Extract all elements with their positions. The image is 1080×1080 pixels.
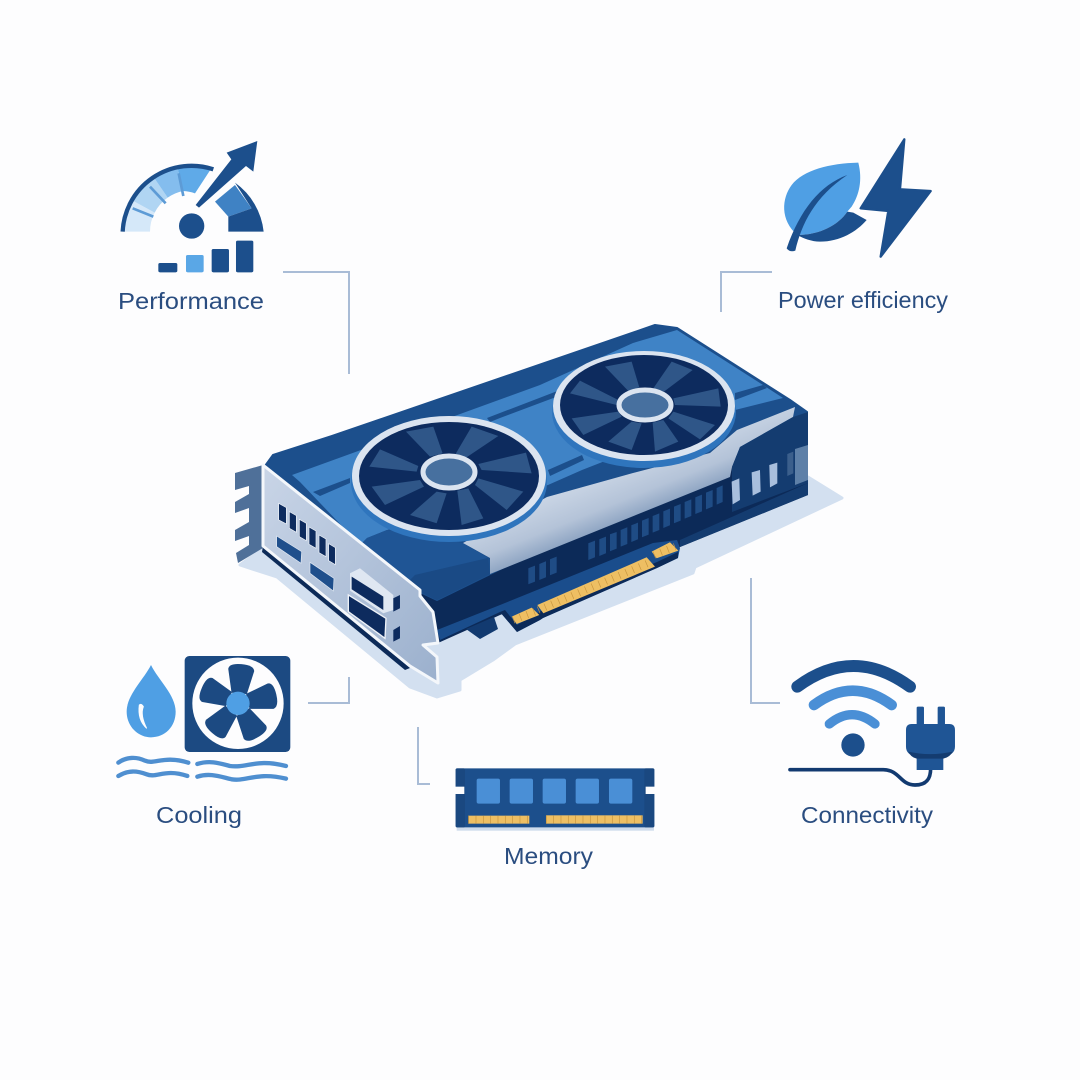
icon: water drop and fan: [118, 656, 290, 780]
lightning bolt: [861, 139, 931, 257]
label: performance: Performance: [118, 288, 264, 314]
gauge arrow: [196, 141, 257, 208]
card body: [273, 325, 808, 643]
connector line: memory: [418, 727, 430, 784]
connector line: cooling: [308, 677, 349, 703]
fan rim: [352, 416, 546, 536]
icon: performance gauge: [123, 141, 264, 272]
silver shroud band: [463, 407, 795, 574]
graphics card: [235, 325, 842, 697]
leaf: [784, 163, 860, 235]
bracket under line: [262, 546, 410, 670]
memory chips: [477, 779, 632, 804]
small connector tab: [466, 617, 498, 639]
fan shadow: [351, 422, 547, 542]
wifi dot: [841, 733, 865, 757]
fan disc: [560, 355, 728, 455]
pcb edge: [437, 540, 680, 640]
label: connectivity: Connectivity: [801, 802, 934, 828]
card drop shadow: [240, 477, 842, 697]
side vents: [732, 452, 793, 504]
leaf vein: [787, 175, 847, 251]
module shadow: [457, 827, 654, 831]
fan 2: [552, 351, 736, 468]
water drop: [127, 665, 176, 737]
board edges: [456, 768, 465, 827]
label: memory: Memory: [504, 843, 594, 869]
fan hub: [226, 692, 250, 715]
fan 1: [351, 416, 547, 542]
label: power efficiency: Power efficiency: [778, 287, 949, 313]
dark front chamfer: [408, 558, 490, 600]
bracket left tab: [235, 465, 263, 563]
gauge hub: [179, 213, 204, 239]
gold edge contacts: [512, 542, 678, 624]
port clips: [393, 595, 400, 612]
bracket plate: [263, 465, 438, 683]
fan shadow: [552, 356, 736, 468]
dark blue side panel: [732, 412, 808, 512]
wifi inner arc: [829, 715, 875, 724]
fan opening: [192, 658, 284, 749]
fan housing: [185, 656, 290, 752]
plug prongs: [917, 707, 924, 727]
gold contacts: [468, 816, 529, 824]
icon: wifi and plug: [790, 666, 955, 785]
gauge outer arc: [123, 166, 213, 232]
drop highlight: [139, 704, 147, 728]
hdmi port lower: [348, 595, 386, 638]
gauge segments: [125, 201, 155, 232]
fan blades: [570, 362, 721, 452]
wifi outer arc: [797, 666, 910, 687]
light blue shroud panel: [292, 330, 783, 545]
fan rim: [553, 351, 735, 461]
module board: [456, 768, 654, 827]
gauge bars: [158, 263, 177, 272]
lower side band: [680, 483, 808, 547]
top shroud: [265, 325, 807, 600]
plug collar: [908, 752, 953, 759]
wifi middle arc: [814, 691, 892, 705]
side panel end cap: [795, 445, 808, 485]
fan blades: [369, 427, 532, 525]
mid blue lower panel: [360, 530, 488, 582]
connector line: connectivity: [751, 578, 780, 703]
io bracket: [235, 465, 438, 683]
label: cooling: Cooling: [156, 802, 242, 828]
icon: leaf and lightning bolt: [784, 139, 931, 257]
fan hub: [619, 390, 671, 420]
connector line: power efficiency: [721, 272, 772, 312]
pcb edge shadow: [500, 552, 678, 632]
vent slots: [279, 503, 335, 565]
fan disc: [359, 422, 539, 530]
leaf shade: [797, 212, 867, 242]
board notches: [455, 787, 464, 794]
icon: memory module: [455, 768, 655, 831]
fan blades: [197, 663, 279, 744]
gauge dividers: [133, 173, 183, 217]
side vent slats: [528, 485, 723, 584]
plug body: [906, 724, 955, 770]
shroud stripes: [313, 352, 767, 496]
display ports: [277, 536, 334, 591]
cable: [790, 768, 931, 785]
water waves: [118, 758, 286, 780]
hdmi port upper: [350, 568, 393, 613]
connector line: performance: [283, 272, 349, 374]
fan hub: [423, 456, 475, 488]
